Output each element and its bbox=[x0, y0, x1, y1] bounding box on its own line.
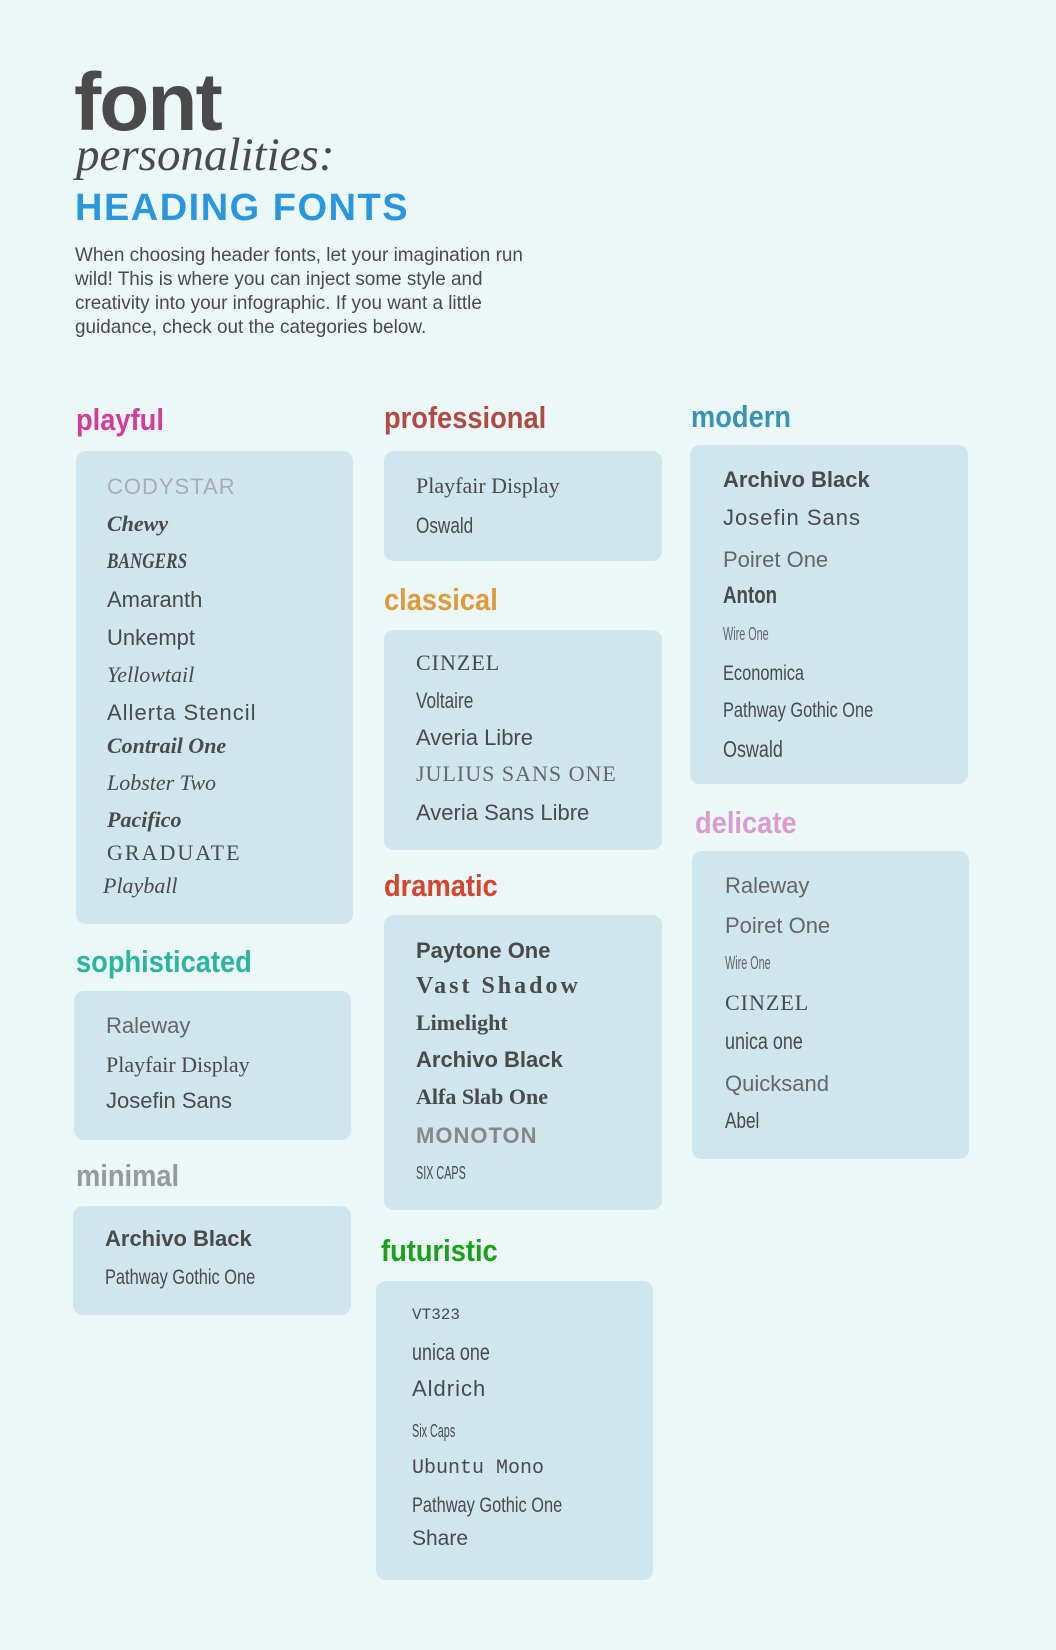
panel: futuristic: Pathway Gothic One bbox=[412, 1494, 562, 1517]
panel: futuristic bbox=[376, 1281, 653, 1580]
subtitle: heading fonts: HEADING FONTS bbox=[75, 187, 409, 229]
panel: minimal: Archivo Black bbox=[105, 1226, 252, 1251]
panel: modern: Josefin Sans bbox=[723, 505, 861, 530]
heading: sophisticated: sophisticated bbox=[76, 944, 252, 979]
panel: delicate: unica one bbox=[725, 1028, 803, 1054]
panel: modern: Pathway Gothic One bbox=[723, 699, 873, 722]
panel: playful: Yellowtail bbox=[107, 662, 194, 687]
panel: dramatic: SIX CAPS bbox=[416, 1163, 466, 1183]
intro paragraph bbox=[75, 244, 523, 338]
heading: dramatic: dramatic bbox=[384, 868, 498, 903]
panel: playful: Lobster Two bbox=[107, 770, 216, 795]
panel: delicate: Quicksand bbox=[725, 1071, 829, 1096]
panel: sophisticated bbox=[74, 991, 351, 1140]
panel: delicate bbox=[692, 851, 969, 1159]
panel: playful: Unkempt bbox=[107, 625, 195, 650]
heading: classical: classical bbox=[384, 582, 498, 617]
title: font: font bbox=[74, 57, 221, 148]
intro paragraph: When choosing header fonts, let your imagination run bbox=[75, 244, 523, 266]
panel: playful bbox=[76, 451, 353, 924]
panel: classical: CINZEL bbox=[416, 650, 500, 675]
panel: modern: Oswald bbox=[723, 736, 783, 762]
panel: modern: Economica bbox=[723, 662, 804, 685]
intro paragraph: wild! This is where you can inject some style and bbox=[75, 268, 483, 290]
panel: sophisticated: Josefin Sans bbox=[106, 1088, 232, 1113]
panel: classical bbox=[384, 630, 662, 850]
panel: dramatic: Limelight bbox=[416, 1010, 508, 1035]
panel: dramatic bbox=[384, 915, 662, 1210]
heading: delicate: delicate bbox=[695, 805, 797, 840]
panel: modern: Archivo Black bbox=[723, 467, 870, 492]
panel: dramatic: Vast Shadow bbox=[416, 973, 581, 999]
panel: futuristic: Ubuntu Mono bbox=[412, 1457, 544, 1480]
panel: classical: Voltaire bbox=[416, 688, 473, 713]
panel: dramatic: Archivo Black bbox=[416, 1047, 563, 1072]
panel: delicate: CINZEL bbox=[725, 990, 809, 1015]
panel: professional: Playfair Display bbox=[416, 473, 560, 498]
panel: dramatic: Alfa Slab One bbox=[416, 1084, 548, 1109]
panel: classical: Averia Sans Libre bbox=[416, 800, 589, 825]
panel: futuristic: Share bbox=[412, 1527, 468, 1550]
panel: professional: Oswald bbox=[416, 513, 473, 538]
panel: playful: Pacifico bbox=[107, 807, 182, 832]
panel: minimal: Pathway Gothic One bbox=[105, 1266, 255, 1289]
panel: dramatic: MONOTON bbox=[416, 1123, 537, 1148]
panel: minimal bbox=[73, 1206, 351, 1315]
panel: playful: Allerta Stencil bbox=[107, 700, 257, 725]
panel: modern: Wire One bbox=[723, 624, 769, 644]
panel: futuristic: Six Caps bbox=[412, 1421, 455, 1441]
panel: modern: Poiret One bbox=[723, 547, 828, 572]
panel: playful: GRADUATE bbox=[107, 840, 242, 865]
panel: futuristic: Aldrich bbox=[412, 1376, 486, 1401]
panel: playful: Amaranth bbox=[107, 587, 202, 612]
panel: playful: Playball bbox=[103, 873, 178, 898]
panel: futuristic: VT323 bbox=[412, 1306, 460, 1324]
heading: futuristic: futuristic bbox=[381, 1233, 498, 1268]
panel: playful: Chewy bbox=[107, 511, 168, 536]
panel: classical: JULIUS SANS ONE bbox=[416, 761, 617, 786]
heading: modern: modern bbox=[691, 399, 791, 434]
title: personalities: personalities: bbox=[76, 129, 334, 181]
panel: delicate: Abel bbox=[725, 1108, 759, 1133]
panel: sophisticated: Raleway bbox=[106, 1013, 190, 1038]
panel: playful: CODYSTAR bbox=[107, 474, 236, 499]
panel: delicate: Raleway bbox=[725, 873, 809, 898]
heading: professional: professional bbox=[384, 400, 546, 435]
panel: delicate: Poiret One bbox=[725, 913, 830, 938]
panel: playful: Contrail One bbox=[107, 733, 226, 758]
heading: playful: playful bbox=[76, 402, 164, 437]
panel: professional bbox=[384, 451, 662, 561]
panel: modern: Anton bbox=[723, 582, 777, 609]
intro paragraph: guidance, check out the categories below. bbox=[75, 316, 426, 338]
panel: classical: Averia Libre bbox=[416, 725, 533, 750]
panel: futuristic: unica one bbox=[412, 1339, 490, 1365]
panel: playful: BANGERS bbox=[107, 548, 187, 573]
panel: modern bbox=[690, 445, 968, 784]
panel: dramatic: Paytone One bbox=[416, 938, 550, 963]
panel: delicate: Wire One bbox=[725, 953, 771, 973]
panel: sophisticated: Playfair Display bbox=[106, 1052, 250, 1077]
heading: minimal: minimal bbox=[76, 1158, 179, 1193]
intro paragraph: creativity into your infographic. If you want a little bbox=[75, 292, 482, 314]
